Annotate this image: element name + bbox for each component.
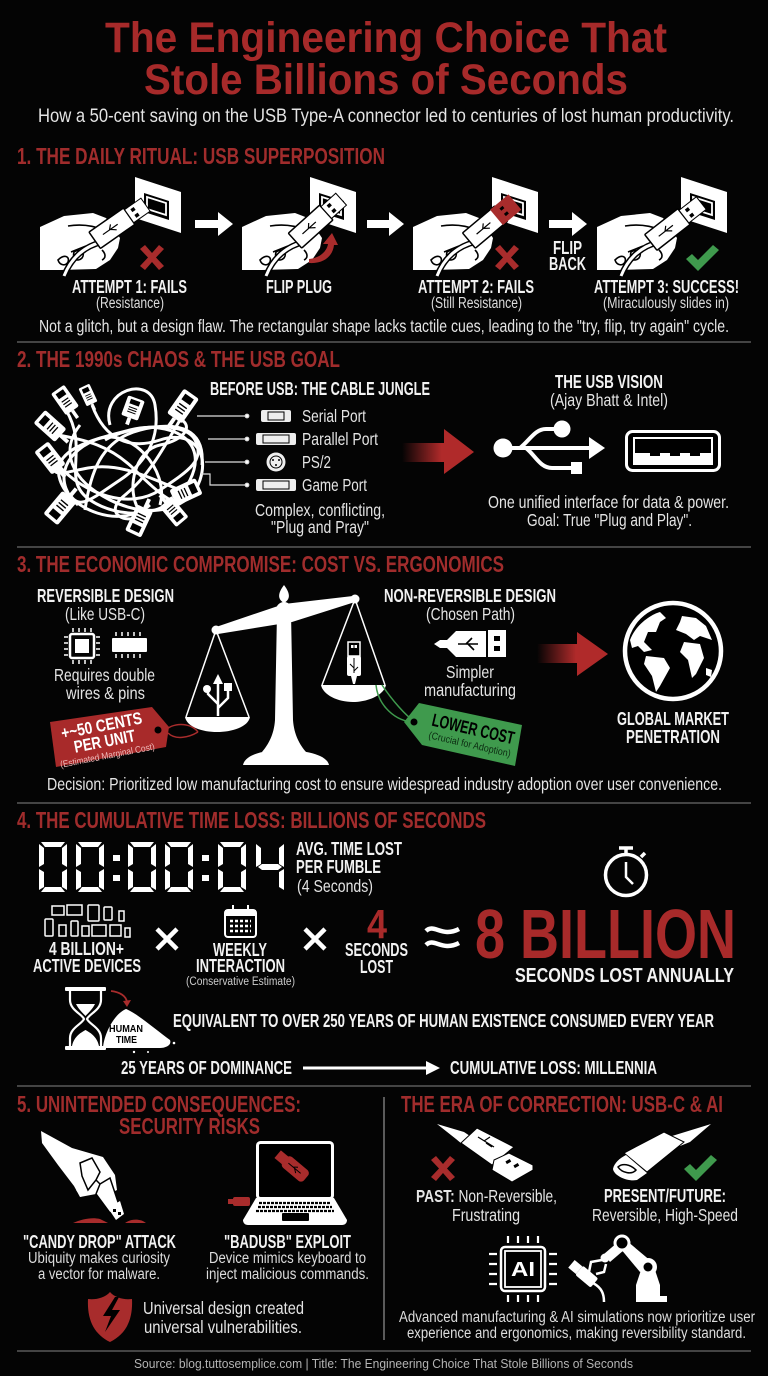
label: global market penetration: PENETRATION: [626, 727, 720, 747]
heading: usb vision: (Ajay Bhatt & Intel): [550, 390, 668, 410]
label: avg time lost: AVG. TIME LOST: [296, 839, 402, 859]
icon: attempt 1 hand and plug: [40, 177, 181, 276]
label: flip back: FLIP: [553, 238, 582, 258]
icon: usb port: [626, 432, 720, 470]
panel: economic compromise: [17, 551, 729, 794]
label: attempt 3: [594, 277, 739, 312]
text: plug and pray: [255, 500, 385, 537]
label: weekly interaction: INTERACTION: [196, 956, 285, 976]
label: past: Frustrating: [452, 1205, 520, 1225]
stat: 4 seconds lost: 4: [367, 901, 387, 947]
icon: hourglass and human time pile: [65, 987, 175, 1053]
panel: cumulative time loss: [17, 807, 736, 1078]
label: present/future: PRESENT/FUTURE:: [604, 1186, 726, 1206]
tag: 50 cents: [50, 707, 198, 771]
icon: usb trident: [494, 420, 605, 474]
row: serial port: Serial Port: [302, 406, 366, 426]
label: present/future: [592, 1186, 738, 1225]
text: unified interface: [488, 492, 729, 530]
label: weekly interaction: (Conservative Estimate): [186, 976, 295, 988]
tag: 50 cents: PER UNIT: [72, 726, 137, 757]
icon: laptop with bad usb: [228, 1142, 347, 1225]
text: universal vulnerabilities: universal vulnerabilities.: [144, 1317, 302, 1337]
row: serial port: [261, 406, 366, 426]
tag: lower cost: LOWER COST: [430, 710, 516, 748]
heading: usb vision: THE USB VISION: [555, 372, 663, 392]
row: parallel port: Parallel Port: [302, 429, 378, 449]
row: ps/2: PS/2: [302, 452, 331, 472]
icon: attempt 2 hand with red plug: [413, 177, 538, 276]
row: ps/2: [266, 452, 331, 472]
label: active devices: [33, 939, 141, 976]
timeline: dominance to millennia: 25 YEARS OF DOMINANCE: [121, 1058, 292, 1078]
row: game port: Game Port: [302, 475, 367, 495]
label: non-reversible design: NON-REVERSIBLE DESIGN: [384, 586, 556, 606]
label: attempt 3: (Miraculously slides in): [603, 295, 729, 312]
heading: section 3: 3. THE ECONOMIC COMPROMISE: COST VS. ERGONOMICS: [17, 551, 504, 577]
icon: balance scale: [185, 585, 386, 765]
heading: section 4: 4. THE CUMULATIVE TIME LOSS: BILLIONS OF SECONDS: [17, 807, 486, 833]
icon: red flip arrow: [309, 233, 338, 263]
text: universal vulnerabilities: Universal design created: [143, 1298, 304, 1318]
icon: green check: [686, 245, 719, 271]
operator: times 2: [305, 929, 325, 949]
source footer: Source: blog.tuttosemplice.com | Title: The Engineering Choice That Stole Billions of Seconds: [134, 1356, 633, 1371]
label: flip back: BACK: [549, 254, 586, 274]
row: parallel port: [256, 429, 378, 449]
timeline: dominance to millennia: CUMULATIVE LOSS: MILLENNIA: [450, 1058, 657, 1078]
leader lines: [197, 414, 249, 487]
title: The Engineering Choice That: [105, 14, 667, 62]
icon: hourglass and human time pile: TIME: [116, 1035, 137, 1046]
icon: chips: [64, 628, 147, 664]
text: plug and pray: Complex, conflicting,: [255, 500, 385, 520]
tag: lower cost: (Crucial for Adoption): [427, 730, 512, 760]
label: attempt 2: (Still Resistance): [431, 295, 522, 312]
icon: cracked shield: [88, 1292, 132, 1342]
panel: era of correction: [399, 1091, 755, 1342]
operator: times 1: [157, 929, 177, 949]
label: avg time lost: (4 Seconds): [297, 876, 373, 896]
icon: green check present: [684, 1155, 717, 1181]
text: candy drop attack: a vector for malware.: [38, 1266, 160, 1283]
icon: globe: [625, 603, 721, 699]
text: badusb exploit: Device mimics keyboard to: [209, 1250, 366, 1267]
text: unified interface: Goal: True "Plug and Play".: [527, 510, 692, 530]
panel: 1990s chaos: [17, 346, 729, 538]
arrow: step 2 to 3: [367, 212, 404, 236]
label: reversible design: (Like USB-C): [65, 604, 145, 624]
icon: stopwatch: [606, 848, 646, 896]
label: weekly interaction: [186, 940, 295, 988]
text: simpler manufacturing: Simpler: [446, 662, 494, 682]
label: past: [416, 1186, 557, 1225]
operator: approximately: [426, 929, 459, 946]
text: badusb exploit: inject malicious commands.: [206, 1266, 369, 1283]
label: reversible design: REVERSIBLE DESIGN: [37, 586, 174, 606]
label: attempt 1: (Resistance): [96, 295, 164, 312]
icon: red cross 2: [495, 245, 519, 270]
heading: section 1: 1. THE DAILY RITUAL: USB SUPERPOSITION: [17, 143, 385, 169]
arrow: chaos to vision: [402, 429, 474, 474]
heading: section 5: [17, 1091, 301, 1139]
icon: devices: [45, 905, 130, 937]
label: avg time lost: [296, 839, 402, 896]
text: double wires: Requires double: [54, 665, 155, 685]
icon: ai chip: AI: [511, 1259, 535, 1281]
heading: section 2: 2. THE 1990s CHAOS & THE USB GOAL: [17, 346, 340, 372]
label: non-reversible design: (Chosen Path): [426, 604, 515, 624]
icon: hand dropping usb: [41, 1131, 146, 1223]
text: double wires: wires & pins: [65, 683, 145, 703]
icon: usb stick: [434, 630, 506, 657]
heading: section 5: SECURITY RISKS: [119, 1113, 260, 1139]
icon: usb-c connector: [613, 1124, 711, 1180]
label: global market penetration: [617, 709, 729, 747]
label: non-reversible design: [384, 586, 556, 624]
text: universal vulnerabilities: [143, 1298, 304, 1337]
icon: attempt 3 hand success: [597, 177, 727, 276]
text: badusb exploit: "BADUSB" EXPLOIT: [224, 1232, 351, 1252]
panel: daily ritual: [17, 143, 739, 336]
heading: usb vision: [550, 372, 668, 410]
icon: calendar: [225, 905, 256, 937]
label: attempt 1: [72, 277, 187, 312]
text: simpler manufacturing: [424, 662, 516, 700]
text: advanced manufacturing: [399, 1309, 755, 1342]
label: active devices: 4 BILLION+: [49, 939, 124, 959]
title: [105, 14, 667, 104]
label: past: PAST: Non-Reversible,: [416, 1186, 557, 1206]
label: weekly interaction: WEEKLY: [213, 940, 267, 960]
text: simpler manufacturing: manufacturing: [424, 680, 516, 700]
panel: security risks: [17, 1091, 369, 1342]
stat: 4 seconds lost: SECONDS: [345, 940, 408, 960]
arrow: to global market: [537, 632, 608, 676]
icon: flip plug hand: [242, 177, 356, 276]
label: attempt 2: ATTEMPT 2: FAILS: [418, 277, 534, 297]
row: game port: [256, 475, 367, 495]
tag: 50 cents: (Estimated Marginal Cost): [59, 742, 156, 771]
icon: ai chip: [489, 1236, 557, 1302]
arrow: step 3 to 4: [549, 212, 587, 236]
icon: cable tangle: [33, 384, 203, 538]
label: avg time lost: PER FUMBLE: [296, 857, 381, 877]
heading: before usb: BEFORE USB: THE CABLE JUNGLE: [210, 379, 430, 399]
text: badusb exploit: [206, 1232, 369, 1283]
icon: red cross past: [431, 1156, 455, 1181]
arrow: step 1 to 2: [195, 212, 233, 236]
label: flip plug: FLIP PLUG: [266, 277, 332, 297]
text: plug and pray: "Plug and Pray": [271, 517, 369, 537]
text: candy drop attack: [23, 1232, 176, 1283]
icon: robot arm with usb: [568, 1236, 667, 1302]
text: candy drop attack: Ubiquity makes curiosity: [28, 1250, 170, 1267]
icon: usb-a connector: [437, 1124, 533, 1182]
digital clock 00:00:04: [39, 842, 284, 892]
stat: 4 seconds lost: LOST: [360, 957, 393, 977]
tag: 50 cents: +~50 CENTS: [60, 709, 144, 743]
label: attempt 1: ATTEMPT 1: FAILS: [72, 277, 187, 297]
icon: hourglass and human time pile: HUMAN: [109, 1024, 143, 1035]
icon: red cross 1: [140, 245, 164, 270]
stat: 4 seconds lost: [345, 901, 408, 977]
label: flip back: [549, 238, 586, 274]
title: Stole Billions of Seconds: [144, 56, 628, 104]
label: reversible design: [37, 586, 174, 624]
timeline: dominance to millennia: [121, 1058, 657, 1078]
text: double wires: [54, 665, 155, 703]
text: candy drop attack: "CANDY DROP" ATTACK: [23, 1232, 176, 1252]
label: attempt 2: [418, 277, 534, 312]
tag: lower cost: [376, 685, 522, 766]
label: active devices: ACTIVE DEVICES: [33, 956, 141, 976]
heading: section 5: 5. UNINTENDED CONSEQUENCES:: [17, 1091, 301, 1117]
